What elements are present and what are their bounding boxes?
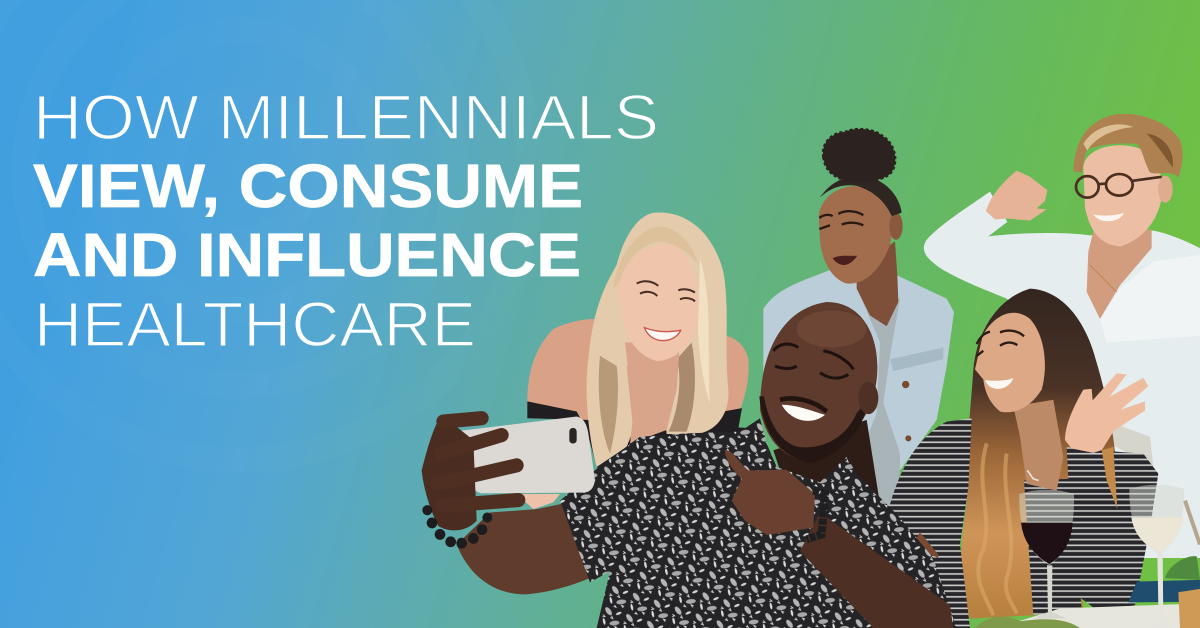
waving hand [1065,373,1148,453]
red wine glass [1019,490,1074,619]
tabletop [1017,603,1200,628]
table scene [975,485,1200,628]
face [617,244,699,361]
raised hand [986,171,1047,221]
title line: how millennials: HOW MILLENNIALS [33,83,659,153]
small cup [1178,589,1200,628]
striped sleeve right [1067,447,1158,613]
title [33,83,659,360]
smile [1093,213,1124,221]
striped fill behind centre man [863,504,943,578]
smile [985,378,1013,389]
denim jacket [763,270,954,507]
striped torso left [890,418,972,628]
long hair [587,212,728,467]
white shirt [924,192,1200,558]
neck and chest [625,342,680,443]
head [760,302,877,462]
serving utensil [1185,501,1200,544]
selfie arm [457,501,610,594]
wrist bracelet [807,491,825,539]
hair tip over sleeve [1102,447,1117,509]
black top [527,401,742,467]
eyes and brows [819,211,863,229]
grey tee [850,295,900,531]
phone camera [569,428,577,443]
smile [644,328,681,341]
title line: and influence: AND INFLUENCE [33,221,581,290]
neck [773,420,880,504]
patterned shirt [560,418,957,628]
neck [857,241,898,326]
phone [453,417,595,493]
ear [1158,176,1173,203]
ear [889,213,903,240]
face [1083,145,1163,246]
white wine glass [1129,485,1184,627]
hair cap [820,176,902,216]
face [819,186,892,284]
hand on shoulder behind woman [917,516,940,558]
hair strands [978,443,1017,615]
forehead hair [613,226,698,289]
necklace [1027,470,1039,481]
thumbs-up hand [725,450,815,535]
hair [1073,114,1183,177]
lips [833,256,857,265]
skin below phone [517,494,560,509]
person: woman with long ombre hair in striped top [863,289,1158,628]
food plate [975,617,1080,628]
title line: view, consume: VIEW, CONSUME [33,152,583,221]
face [975,313,1045,412]
person: centre man taking a selfie [422,302,957,628]
decorative swirl rings [0,0,530,460]
glasses [1076,174,1162,198]
eyes and brows [773,344,853,378]
title line: healthcare: HEALTHCARE [34,290,476,360]
shoulders [527,319,749,447]
forearm [800,512,953,628]
beaded bracelet [422,505,492,549]
long hair [961,289,1117,619]
neck and chest [1013,400,1063,491]
forehead highlight [797,310,867,347]
person: man with glasses in white shirt [924,114,1200,558]
black top lower fill [587,420,763,479]
salad greens [1165,556,1200,580]
buttons [902,381,909,388]
striped chest [1024,479,1082,615]
person: woman with hair bun in denim jacket [763,129,954,531]
necklace [1090,265,1117,292]
ear [858,382,878,414]
person: blonde woman [517,212,763,509]
neck and chest [1087,230,1152,319]
moustache and smile [780,398,827,411]
blue tray [1128,580,1200,602]
selfie hand [422,415,518,530]
beard [759,396,868,463]
brows and eyes [977,331,1024,356]
hair bun [823,129,895,181]
eyes [637,281,695,301]
